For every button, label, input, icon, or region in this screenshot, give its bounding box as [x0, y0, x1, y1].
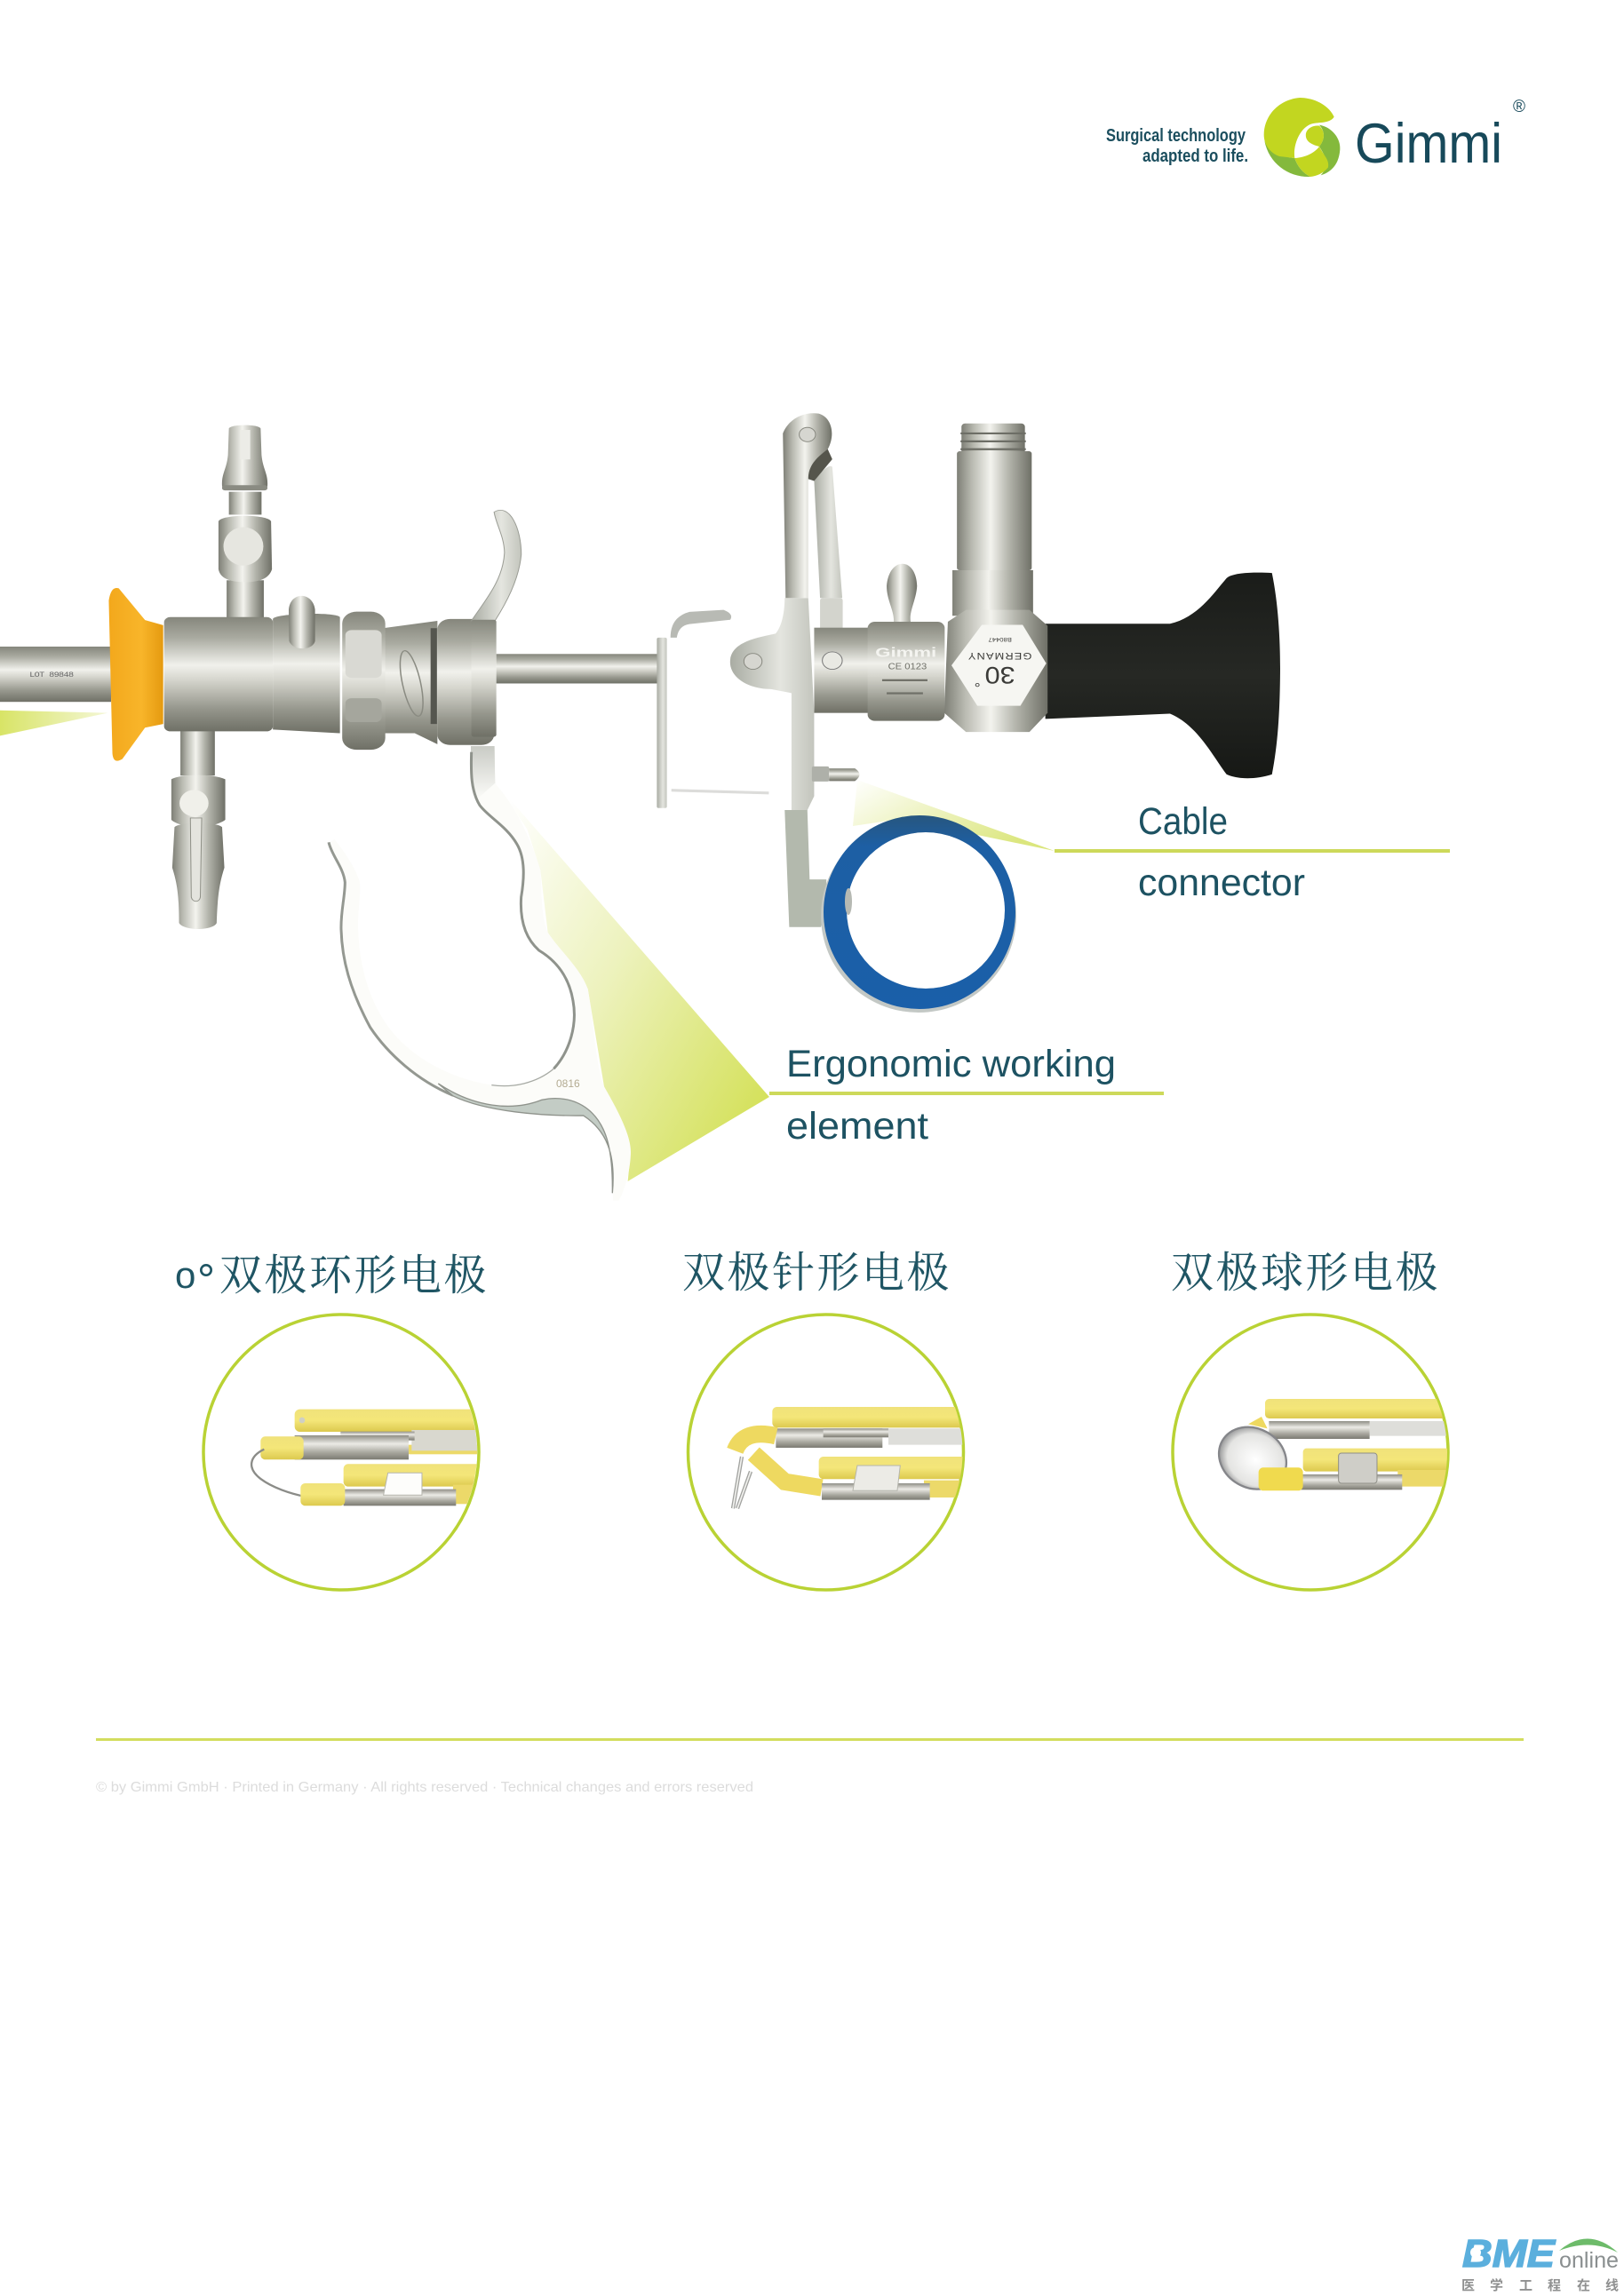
footer copyright: © by Gimmi GmbH · Printed in Germany · All rights reserved · Technical changes and errors reserved [96, 1780, 753, 1795]
tagline: adapted to life. [1142, 147, 1248, 166]
label: cable connector: Cable [1138, 800, 1228, 843]
hex block: ° [975, 674, 981, 689]
lower arm [784, 810, 826, 927]
blue cable connector ring [821, 815, 1016, 1013]
upper arm left [783, 413, 832, 598]
white bracket [657, 610, 784, 808]
logo: BME online watermark: 学 [1490, 2277, 1503, 2293]
hinge shadow [808, 449, 832, 481]
second barrel [273, 614, 340, 733]
knob [289, 596, 315, 648]
callout wedge: ergonomic working element [495, 782, 769, 1181]
lever [820, 598, 843, 662]
panel: bipolar needle electrode [682, 1250, 968, 1590]
collar [437, 619, 494, 745]
circle frame [203, 1315, 479, 1590]
logo: BME online watermark: 在 [1577, 2278, 1590, 2293]
hex block: B80447 [988, 636, 1012, 643]
knob [887, 564, 917, 625]
logo: BME online watermark: 工 [1519, 2278, 1532, 2293]
light post [952, 424, 1033, 616]
screws [744, 427, 816, 670]
callout wedge: sheath [0, 711, 107, 735]
sheath tube [0, 647, 111, 702]
hex block [944, 610, 1047, 732]
logo: BME online watermark: online [1559, 2248, 1619, 2273]
label: cable connector: connector [1138, 862, 1305, 904]
taper with groove [383, 621, 437, 744]
logo: BME online watermark [1461, 2232, 1619, 2293]
orange flange [108, 588, 163, 761]
ring collar with brand engraving: Gimmi [875, 645, 936, 660]
callout wedge: cable connector [853, 780, 1055, 851]
knurled nut [342, 612, 386, 750]
label: ergonomic working element: element [786, 1105, 928, 1148]
engraving: handle number: 0816 [556, 1077, 580, 1090]
heading: o [175, 1254, 195, 1296]
sheath engraving: LOT 89848 [29, 671, 74, 679]
hex block: GERMANY [968, 650, 1031, 662]
hex block: 30 [985, 661, 1015, 687]
logo: BME online watermark: 程 [1548, 2278, 1561, 2293]
heading: 双极球形电极 [1171, 1250, 1440, 1297]
bottom port [171, 729, 226, 929]
label: cable connector [1055, 800, 1450, 904]
black eyepiece [1046, 573, 1280, 778]
finger rest [472, 510, 521, 621]
logo: Gimmi brand with tagline [1106, 98, 1525, 177]
electrode photo [1217, 1399, 1447, 1490]
footer rule [96, 1738, 1524, 1741]
frame column [730, 598, 814, 812]
electrode photo [251, 1410, 482, 1506]
label: ergonomic working element: Ergonomic working [786, 1043, 1116, 1085]
icon: Gimmi swirl mark [1264, 98, 1340, 177]
tagline: Surgical technology [1106, 126, 1246, 146]
collar front plate [472, 620, 497, 737]
body cylinder [164, 617, 273, 731]
electrode photo [733, 1407, 968, 1508]
heading: 双极针形电极 [682, 1250, 951, 1297]
panel: 0 degree bipolar loop electrode [175, 1252, 489, 1590]
heading: ° [197, 1255, 215, 1305]
label: ergonomic working element [769, 1043, 1164, 1148]
heading: 双极环形电极 [219, 1252, 489, 1299]
circle frame [1173, 1315, 1448, 1590]
logo: BME online watermark: BME [1462, 2232, 1556, 2276]
ring collar with brand engraving: CE 0123 [888, 662, 927, 671]
instrument: sheath and valve assembly [0, 425, 657, 929]
pin [812, 767, 859, 782]
ring collar with brand engraving [868, 622, 944, 721]
working tube [497, 654, 657, 683]
handle: ergonomic working element [329, 746, 631, 1201]
circle frame [688, 1315, 963, 1590]
tagline [1106, 126, 1248, 166]
logo: BME online watermark: 医 [1461, 2278, 1475, 2293]
instrument: telescope and working element [657, 413, 1280, 927]
lever pivot [823, 652, 842, 670]
logo: BME online watermark: 线 [1605, 2277, 1619, 2293]
upper arm right [814, 466, 842, 598]
wordmark: Gimmi [1355, 113, 1502, 175]
top port [219, 425, 272, 621]
panel: bipolar ball electrode [1171, 1250, 1450, 1590]
barrel [814, 628, 870, 713]
registered mark: ® [1513, 98, 1525, 116]
